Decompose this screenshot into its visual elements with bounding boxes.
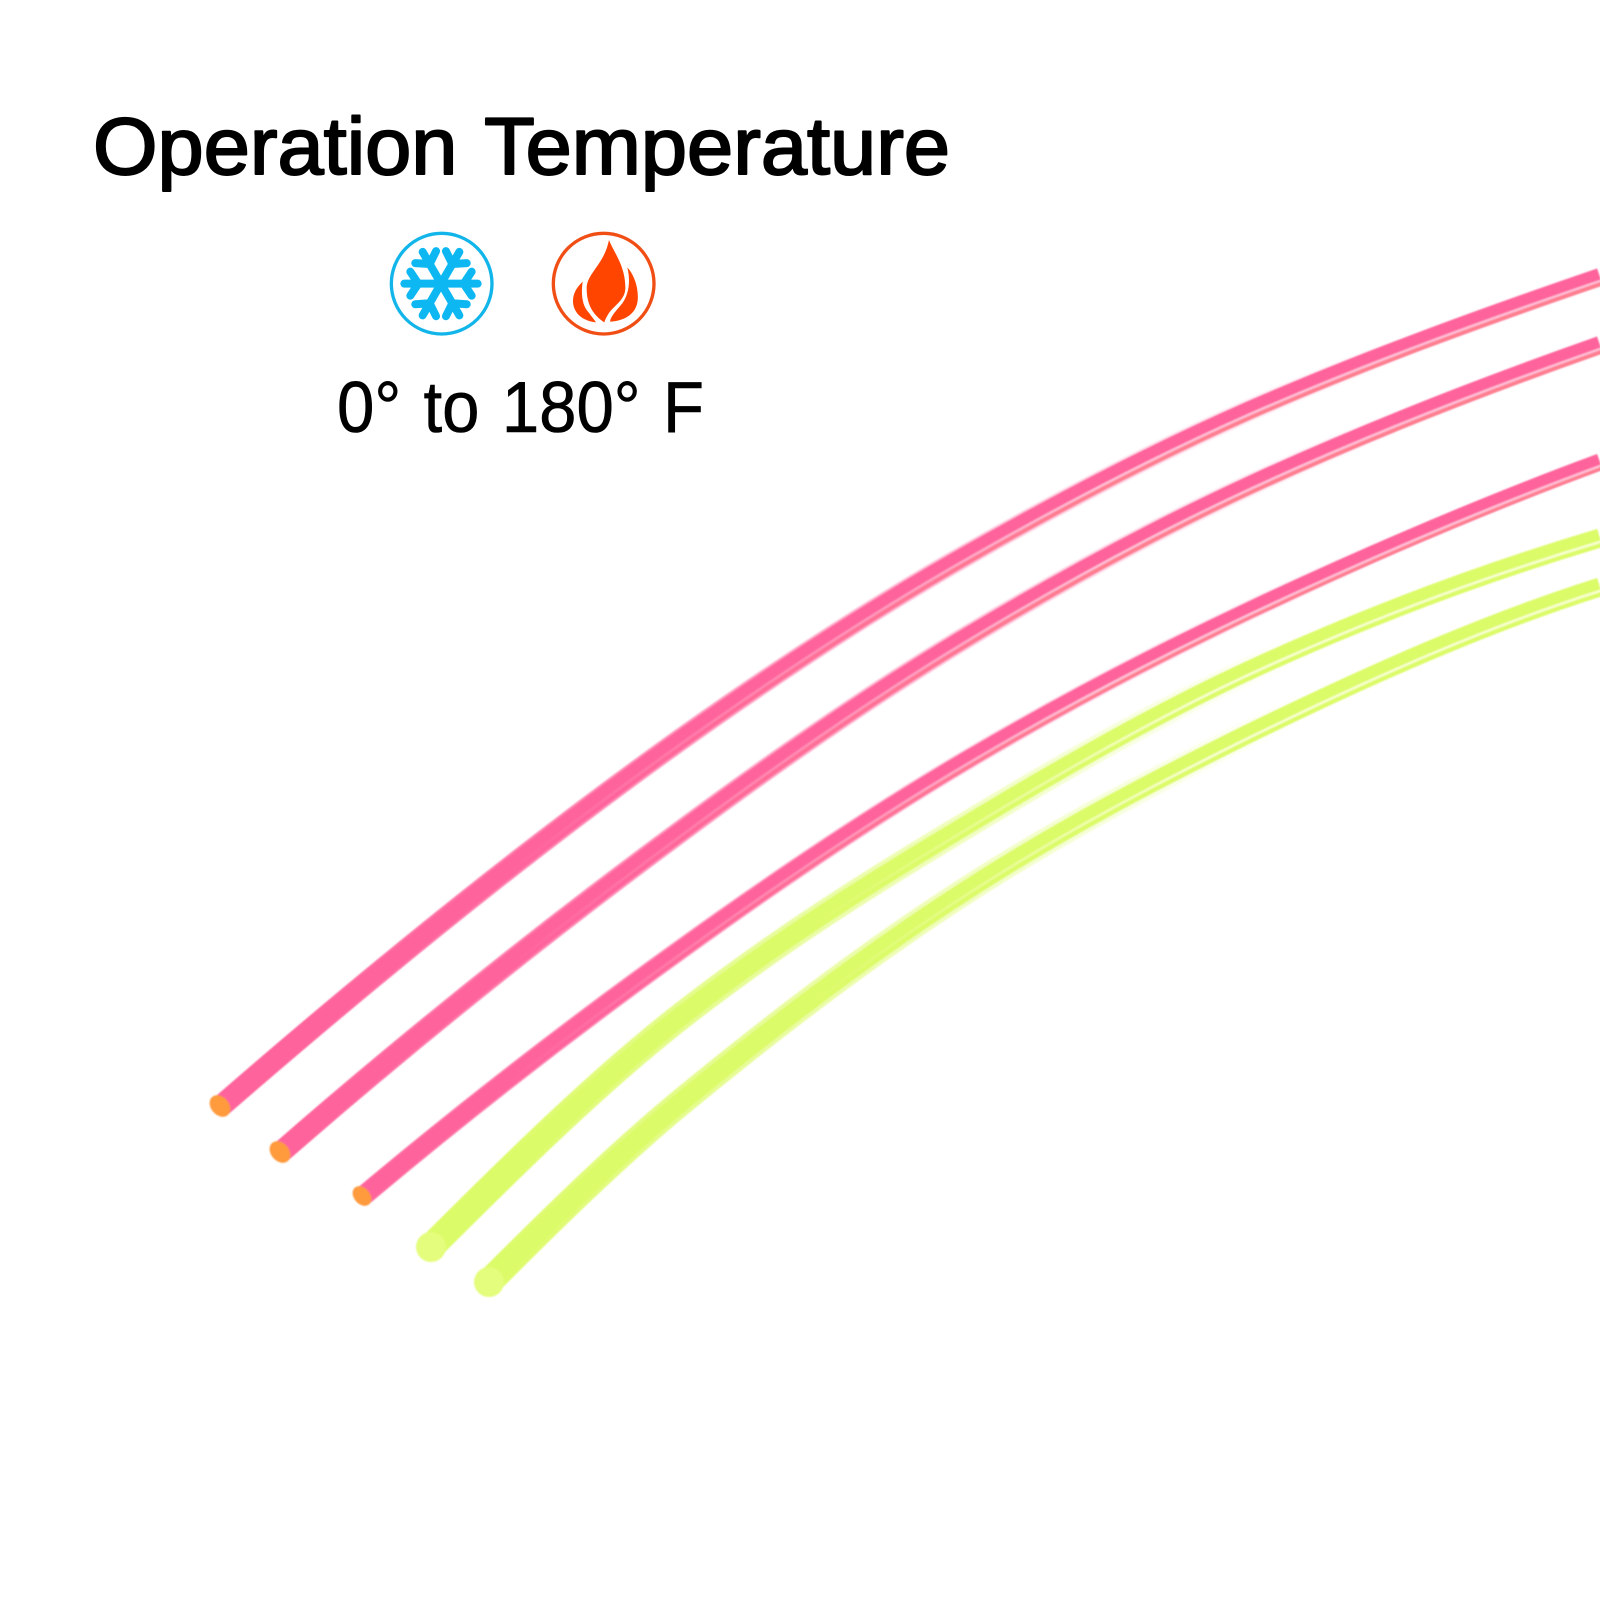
green fiber rod 5: [474, 587, 1600, 1297]
icon: snowflake in circle: [391, 233, 492, 334]
temperature range text: 0° to 180° F: [337, 368, 704, 448]
title: Operation Temperature: [93, 102, 950, 192]
green fiber rod 4: [416, 538, 1600, 1262]
icon: flame in circle: [553, 233, 654, 334]
pink fiber rod 1: [205, 277, 1600, 1121]
pink fiber rod 2: [265, 345, 1600, 1167]
pink fiber rod 3: [349, 462, 1600, 1210]
